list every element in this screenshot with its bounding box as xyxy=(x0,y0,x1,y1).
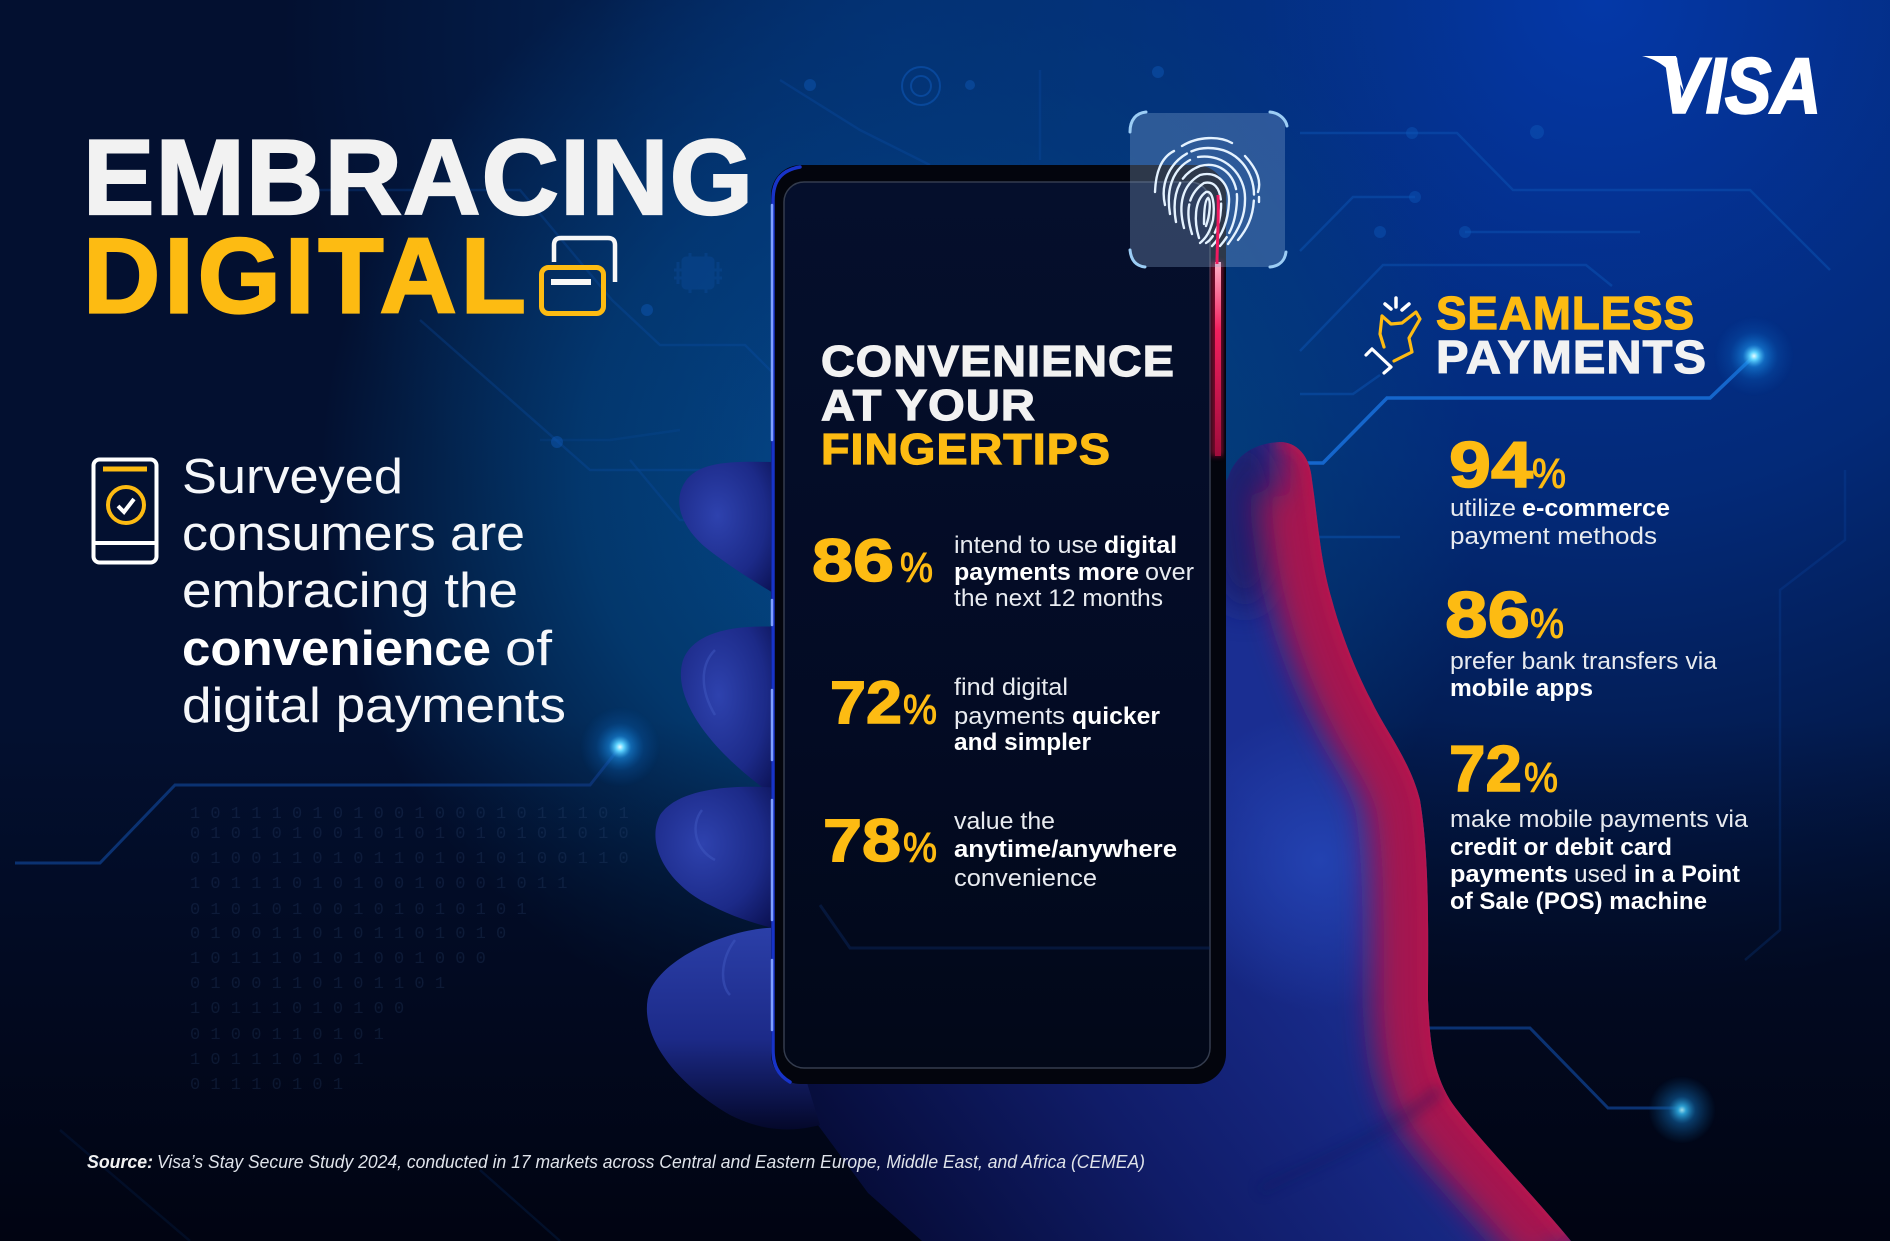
stat: 72 percent seamless: credit or debit card xyxy=(1450,834,1672,861)
intro text xyxy=(182,450,566,733)
circuit nodes xyxy=(551,66,1544,448)
finger 4 xyxy=(647,928,820,1129)
stat: 86 percent: intend to use xyxy=(954,532,1098,559)
intro text: consumers are xyxy=(182,507,525,561)
seamless payments heading xyxy=(1436,287,1707,383)
glow line to seamless payments xyxy=(1305,356,1754,463)
icon: mobile check xyxy=(94,460,156,562)
binary code texture: 0 1 0 0 1 1 0 1 0 1 1 0 1 0 1 0 1 0 0 1 1 0 xyxy=(190,850,629,869)
binary code texture: 1 0 1 1 1 0 1 0 1 xyxy=(190,1051,363,1070)
intro text: of xyxy=(505,622,552,676)
icon: tapping hand xyxy=(1366,298,1420,373)
binary code texture: 0 1 0 0 1 1 0 1 0 1 1 0 1 xyxy=(190,975,445,994)
binary code texture: 0 1 0 1 0 1 0 0 1 0 1 0 1 0 1 0 1 xyxy=(190,901,527,920)
finger 3 xyxy=(655,787,780,930)
stat: 94 percent: 94 xyxy=(1449,428,1533,501)
stat: 78 percent: value the xyxy=(954,808,1055,835)
glow line lower right xyxy=(1429,1028,1682,1108)
icon: cards xyxy=(542,238,615,314)
right red edge xyxy=(1211,262,1223,456)
finger nail creases xyxy=(696,650,735,995)
stat: 78 percent: anytime/anywhere xyxy=(954,836,1177,863)
stat: 86 percent seamless: prefer bank transfers via xyxy=(1450,648,1717,675)
binary code texture: 1 0 1 1 1 0 1 0 1 0 0 1 0 0 0 1 0 1 1 1 0 1 xyxy=(190,805,629,824)
phone body xyxy=(771,165,1226,1084)
stat: 72 percent: and simpler xyxy=(954,729,1091,756)
binary code texture: 1 0 1 1 1 0 1 0 1 0 0 1 0 0 0 1 0 1 1 xyxy=(190,875,567,894)
stat: 72 percent xyxy=(830,669,1160,756)
stat: 78 percent xyxy=(823,807,1177,892)
stat: 72 percent: % xyxy=(903,686,937,733)
binary code texture: 1 0 1 1 1 0 1 0 1 0 0 1 0 0 0 xyxy=(190,950,486,969)
left blue edge xyxy=(772,167,800,1082)
intro text: convenience xyxy=(182,622,491,676)
stat: 72 percent: 72 xyxy=(830,669,902,736)
stat: 78 percent: convenience xyxy=(954,865,1097,892)
stat: 86 percent xyxy=(812,527,1194,612)
stat: 78 percent: % xyxy=(903,824,937,871)
stat: 72 percent seamless: make mobile payments via xyxy=(1450,806,1748,833)
phone heading: CONVENIENCE xyxy=(821,337,1175,386)
target rings xyxy=(902,67,940,105)
Visa logo: VISA xyxy=(1660,42,1821,130)
stat: 72 percent seamless: 72 xyxy=(1449,732,1522,805)
stat: 86 percent seamless: mobile apps xyxy=(1450,675,1593,702)
stat: 72 percent seamless: used xyxy=(1574,861,1627,888)
palm and thumb xyxy=(760,430,1580,1241)
glowing node upper right xyxy=(1714,316,1794,396)
glow line lower left xyxy=(15,747,620,863)
stat: 86 percent seamless: 86 xyxy=(1445,578,1530,651)
binary code texture: 0 1 0 0 1 1 0 1 0 1 xyxy=(190,1026,384,1045)
stat: 94 percent: % xyxy=(1532,450,1566,497)
finger 1 xyxy=(679,462,780,597)
red streak through fingerprint xyxy=(1217,195,1218,264)
hand xyxy=(647,430,1580,1241)
fingerprint xyxy=(1155,138,1259,246)
intro text: digital payments xyxy=(182,679,566,733)
finger 2 xyxy=(681,627,780,799)
stat: 86 percent: over xyxy=(1145,559,1194,586)
stat: 86 percent: the next 12 months xyxy=(954,585,1163,612)
stat: 86 percent seamless: % xyxy=(1530,600,1564,647)
stat: 94 percent: e-commerce xyxy=(1522,495,1670,522)
stat: 86 percent: payments more xyxy=(954,559,1139,586)
stat: 72 percent seamless: % xyxy=(1524,754,1558,801)
corner brackets xyxy=(1130,112,1287,267)
intro text: embracing the xyxy=(182,564,518,618)
binary code texture: 0 1 0 0 1 1 0 1 0 1 1 0 1 0 1 0 xyxy=(190,925,506,944)
stat: 72 percent seamless: payments xyxy=(1450,861,1568,888)
seamless payments heading: SEAMLESS xyxy=(1436,287,1695,339)
stat: 86 percent seamless xyxy=(1445,578,1717,702)
stat: 94 percent: payment methods xyxy=(1450,523,1657,550)
chip icon xyxy=(674,253,722,293)
stat: 78 percent: 78 xyxy=(823,807,901,874)
stat: 86 percent: 86 xyxy=(812,527,894,594)
stat: 72 percent: payments xyxy=(954,703,1065,730)
title: EMBRACING xyxy=(83,117,753,237)
title xyxy=(83,117,753,336)
faint screen line xyxy=(820,905,1210,948)
binary code texture: 0 1 0 1 0 1 0 0 1 0 1 0 1 0 1 0 1 0 1 0 1 0 xyxy=(190,825,629,844)
stat: 72 percent: quicker xyxy=(1072,703,1160,730)
title: DIGITAL xyxy=(83,216,526,336)
stat: 72 percent seamless xyxy=(1449,732,1748,915)
stat: 94 percent: utilize xyxy=(1450,495,1516,522)
stat: 86 percent: % xyxy=(900,544,933,591)
source note: Source: xyxy=(87,1152,153,1172)
intro text: Surveyed xyxy=(182,450,403,504)
phone heading xyxy=(821,337,1175,474)
binary code texture xyxy=(190,805,629,1095)
phone heading: AT YOUR xyxy=(821,381,1036,430)
glowing node lower right xyxy=(1648,1076,1716,1144)
stat: 94 percent xyxy=(1449,428,1670,550)
stat: 72 percent seamless: in a Point xyxy=(1634,861,1740,888)
stat: 86 percent: digital xyxy=(1104,532,1177,559)
seamless payments heading: PAYMENTS xyxy=(1436,331,1707,383)
stat: 72 percent seamless: of Sale (POS) machine xyxy=(1450,888,1707,915)
fingerprint panel xyxy=(1130,112,1287,267)
binary code texture: 1 0 1 1 1 0 1 0 1 0 0 xyxy=(190,1000,404,1019)
stat: 72 percent: find digital xyxy=(954,674,1068,701)
phone xyxy=(771,165,1226,1084)
phone heading: FINGERTIPS xyxy=(821,425,1111,474)
source note: Visa’s Stay Secure Study 2024, conducted in 17 markets across Central and Eastern Europe, Middle East, and Africa (CEMEA) xyxy=(157,1152,1145,1172)
binary code texture: 0 1 1 1 0 1 0 1 xyxy=(190,1076,343,1095)
glowing node left xyxy=(580,707,660,787)
phone screen xyxy=(784,182,1210,1068)
